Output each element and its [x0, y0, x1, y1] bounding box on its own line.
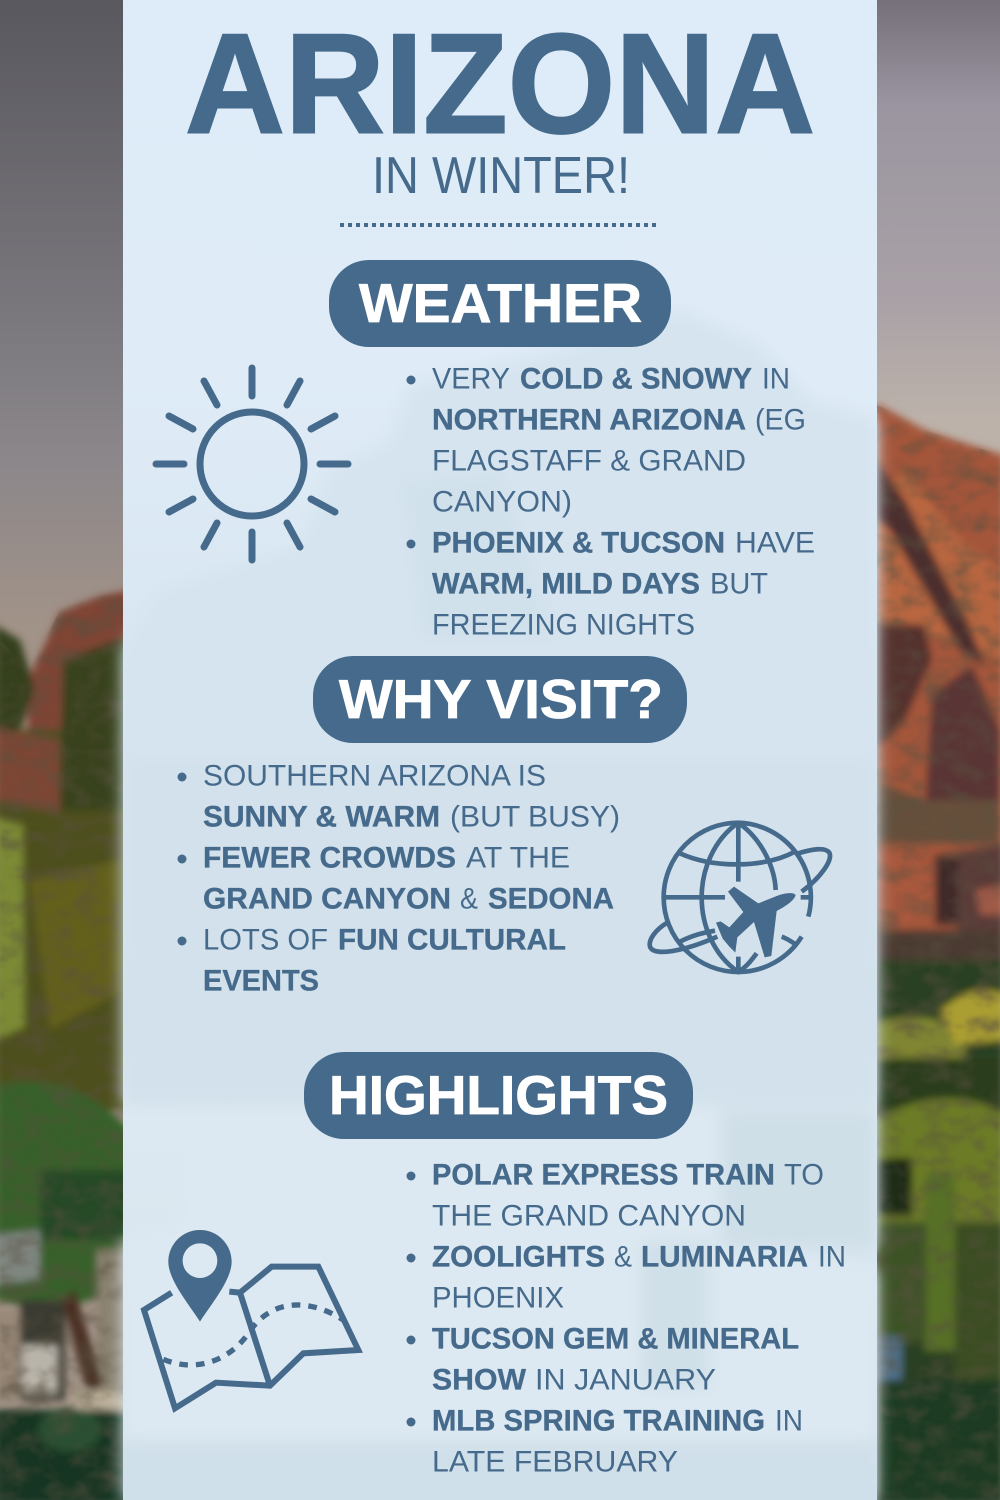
heading: why visit	[313, 656, 687, 743]
panel: weather	[156, 260, 815, 642]
text: highlights bullets: ZOOLIGHTS	[432, 1240, 605, 1274]
text: weather bullets: FREEZING NIGHTS	[432, 608, 695, 642]
dotted divider	[340, 223, 656, 227]
text: weather bullets: WARM, MILD DAYS	[432, 568, 700, 600]
text: weather bullets: VERY	[432, 362, 510, 396]
heading: why visit: WHY VISIT?	[339, 668, 663, 730]
text: weather bullets	[406, 362, 815, 642]
right trees	[876, 960, 1000, 1500]
panel: translucent background	[123, 0, 877, 1500]
text: why visit bullets: AT THE	[466, 842, 570, 874]
text: weather bullets: (EG	[755, 404, 806, 436]
text: why visit bullets: SEDONA	[488, 882, 614, 916]
heading: weather: WEATHER	[359, 272, 642, 334]
text: highlights bullets: IN	[818, 1240, 846, 1274]
text: weather bullets: CANYON)	[432, 486, 572, 518]
text: why visit bullets: GRAND CANYON	[203, 882, 451, 916]
text: why visit bullets	[178, 760, 620, 998]
text: why visit bullets: SOUTHERN ARIZONA IS	[203, 760, 546, 792]
text: weather bullets: COLD & SNOWY	[520, 362, 752, 396]
title: ARIZONA	[185, 4, 815, 164]
right mountain	[876, 403, 1000, 950]
text: highlights bullets: LATE FEBRUARY	[432, 1446, 678, 1478]
text: highlights bullets: LUMINARIA	[641, 1240, 808, 1274]
text: highlights bullets: SHOW	[432, 1364, 527, 1396]
text: highlights bullets: IN	[775, 1404, 803, 1438]
heading: weather	[329, 260, 671, 347]
icon: sun	[156, 368, 348, 560]
heading: highlights: HIGHLIGHTS	[329, 1064, 668, 1126]
icon: map with pin	[144, 1230, 358, 1408]
text: weather bullets: BUT	[710, 568, 768, 600]
text: weather bullets: NORTHERN ARIZONA	[432, 404, 746, 436]
text: highlights bullets: TUCSON GEM & MINERAL	[432, 1322, 799, 1356]
text: why visit bullets: FUN CULTURAL	[338, 924, 566, 956]
heading: highlights	[304, 1052, 693, 1139]
panel: highlights	[144, 1052, 846, 1478]
icon: globe with plane	[650, 823, 830, 972]
text: highlights bullets: THE GRAND CANYON	[432, 1200, 746, 1232]
text: why visit bullets: FEWER CROWDS	[203, 842, 456, 874]
text: highlights bullets: IN JANUARY	[535, 1364, 716, 1396]
text: highlights bullets: TO	[784, 1158, 824, 1192]
text: highlights bullets	[406, 1158, 846, 1478]
foliage and rock texture	[0, 400, 1000, 1500]
panel: why visit	[178, 656, 830, 998]
text: weather bullets: PHOENIX & TUCSON	[432, 526, 725, 560]
subtitle: IN WINTER!	[372, 147, 630, 205]
text: why visit bullets: &	[460, 882, 478, 916]
left mountain and trees	[28, 590, 130, 730]
text: why visit bullets: EVENTS	[203, 964, 319, 998]
text: highlights bullets: MLB SPRING TRAINING	[432, 1404, 765, 1438]
text: weather bullets: IN	[762, 362, 790, 396]
text: highlights bullets: PHOENIX	[432, 1282, 564, 1314]
text: weather bullets: HAVE	[735, 526, 815, 560]
text: why visit bullets: LOTS OF	[203, 924, 328, 956]
text: why visit bullets: SUNNY & WARM	[203, 800, 440, 834]
text: highlights bullets: POLAR EXPRESS TRAIN	[432, 1158, 775, 1192]
text: why visit bullets: (BUT BUSY)	[450, 800, 620, 834]
text: highlights bullets: &	[614, 1240, 632, 1274]
text: weather bullets: FLAGSTAFF & GRAND	[432, 444, 746, 478]
